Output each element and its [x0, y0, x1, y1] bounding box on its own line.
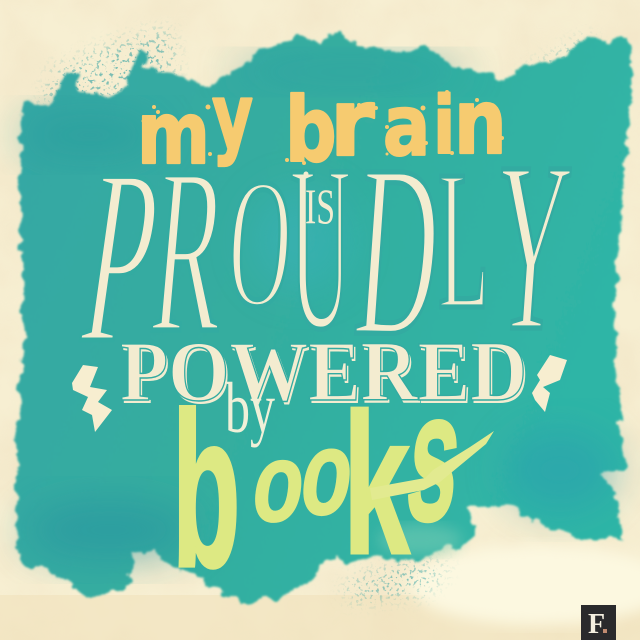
teal speckle: splatter around blob edge	[40, 30, 600, 600]
word: books: o	[246, 420, 313, 545]
word: PROUDLY: D	[348, 115, 448, 387]
word: PROUDLY: L	[438, 130, 489, 351]
word: PROUDLY: P	[68, 117, 174, 394]
heading: my brain: r	[330, 69, 374, 177]
logo badge: F	[588, 609, 605, 640]
heading: my brain: i	[433, 81, 455, 173]
icon: left lightning bolt	[72, 365, 112, 432]
word: books	[172, 353, 494, 613]
word: PROUDLY	[68, 113, 577, 394]
word: books: s	[399, 353, 471, 559]
word: PROUDLY: U	[290, 118, 351, 379]
word: is: IS	[305, 178, 335, 234]
word: POWERED: POWERED	[120, 323, 527, 419]
word: books: b	[172, 367, 240, 613]
heading: my brain: a	[383, 78, 430, 176]
decorative dots on heading	[142, 90, 504, 165]
brush swash of k and s	[370, 431, 494, 500]
heading: my brain: y	[212, 67, 253, 169]
heading: my brain	[137, 67, 507, 184]
word: PROUDLY: O	[224, 141, 297, 346]
heading: my brain: m	[137, 84, 210, 184]
word: is	[304, 172, 335, 234]
heading: my brain: b	[285, 80, 337, 183]
word: POWERED: POWERED	[122, 326, 529, 422]
word: PROUDLY: Y	[486, 113, 577, 382]
icon: right lightning bolt	[532, 355, 567, 412]
logo badge	[581, 605, 616, 640]
word: by: by	[225, 368, 275, 448]
word: books: o	[293, 405, 362, 540]
heading: my brain: n	[454, 71, 507, 175]
word: books: k	[343, 372, 410, 595]
word: PROUDLY: R	[143, 119, 237, 382]
